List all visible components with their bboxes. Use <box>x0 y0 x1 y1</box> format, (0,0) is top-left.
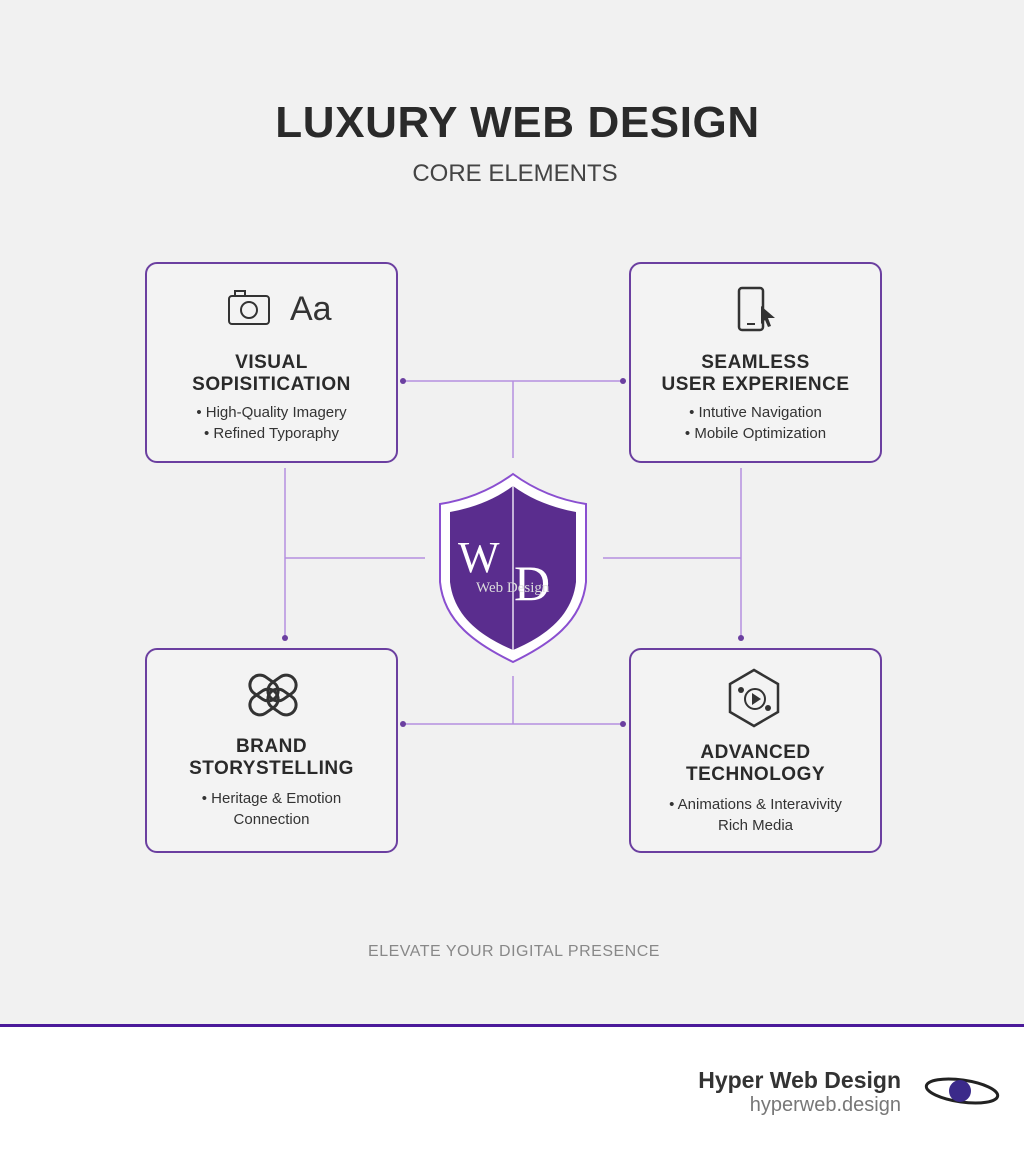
panel: seamless user experience <box>629 262 882 463</box>
footer brand text: Hyper Web Design <box>698 1067 901 1093</box>
panel: seamless user experience: SEAMLESS <box>701 352 810 373</box>
panel: advanced technology: ADVANCED <box>700 742 811 763</box>
panel: seamless user experience: USER EXPERIENCE <box>661 374 850 395</box>
panel: seamless user experience: • Intutive Navigation <box>689 404 822 421</box>
footer brand text <box>698 1067 901 1116</box>
tagline: ELEVATE YOUR DIGITAL PRESENCE <box>368 943 660 960</box>
panel: advanced technology <box>629 648 882 853</box>
title: LUXURY WEB DESIGN <box>275 98 760 147</box>
panel: visual sophistication: VISUAL <box>235 352 308 373</box>
icon: interlocked links <box>248 674 298 716</box>
icon: hexagon play <box>728 668 780 728</box>
panel: brand storytelling: • Heritage & Emotion <box>202 790 341 807</box>
shield logo: W <box>458 533 500 582</box>
panel: visual sophistication: • Refined Typoraphy <box>204 425 339 442</box>
shield logo: Web Design <box>476 580 550 596</box>
subtitle: CORE ELEMENTS <box>412 160 618 187</box>
icon: camera and Aa <box>228 290 332 328</box>
icon: camera and Aa: Aa <box>290 290 332 328</box>
panel: advanced technology: • Animations & Interavivity <box>669 796 842 813</box>
footer <box>0 1024 1024 1157</box>
shield logo: D <box>514 555 550 611</box>
panel: brand storytelling: BRAND <box>236 736 307 757</box>
footer logo <box>924 1078 1000 1104</box>
panel: visual sophistication: SOPISITICATION <box>192 374 351 395</box>
panel: brand storytelling <box>145 648 398 853</box>
panel: brand storytelling: Connection <box>234 811 309 828</box>
footer brand text: hyperweb.design <box>750 1094 901 1116</box>
icon: phone <box>738 286 775 332</box>
shield logo <box>439 472 587 664</box>
panel: visual sophistication <box>145 262 398 463</box>
panel: seamless user experience: • Mobile Optimization <box>685 425 826 442</box>
panel: advanced technology: Rich Media <box>718 817 793 834</box>
panel: brand storytelling: STORYSTELLING <box>189 758 354 779</box>
panel: advanced technology: TECHNOLOGY <box>686 764 825 785</box>
panel: visual sophistication: • High-Quality Imagery <box>196 404 347 421</box>
